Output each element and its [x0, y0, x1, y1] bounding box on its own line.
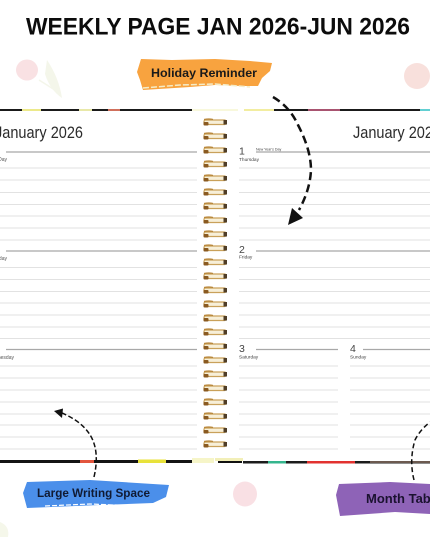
- title: WEEKLY PAGE JAN 2026-JUN 2026: [26, 14, 410, 40]
- day 1: 1: [239, 146, 245, 158]
- decorative flower bottom center: [233, 482, 257, 506]
- arrow: large writing space upward: [54, 408, 96, 477]
- spiral binding: [204, 119, 227, 448]
- left page: day dividers: [6, 152, 197, 350]
- callout: Holiday Reminder: Holiday Reminder: [151, 66, 257, 80]
- planner binding top: [0, 109, 430, 111]
- day 3: 3: [239, 343, 245, 355]
- left page: day labels: [0, 157, 14, 361]
- day 4: Sunday: [350, 354, 367, 360]
- callout: Holiday Reminder: [137, 59, 272, 90]
- day 1: [239, 146, 281, 163]
- day 2: [239, 244, 253, 260]
- day 2: 2: [239, 244, 245, 256]
- arrow: month tabs upward: [412, 422, 430, 480]
- planner binding bottom: [0, 458, 430, 464]
- callout: Large Writing Space: Large Writing Space: [37, 488, 150, 500]
- left page: ruled lines: [0, 168, 197, 449]
- day 3: Saturday: [239, 354, 259, 360]
- decorative leaf bottom left: [0, 522, 8, 537]
- day 3: [239, 343, 259, 360]
- day 1: New Year's Day: [256, 148, 281, 152]
- right page: day dividers: [256, 152, 430, 350]
- day 1: Thursday: [239, 157, 260, 163]
- day 2: Friday: [239, 254, 253, 260]
- decorative flower top right: [404, 63, 430, 89]
- day 4: 4: [350, 343, 356, 355]
- day 4: [350, 343, 367, 360]
- arrow: holiday reminder to January 2: [273, 97, 311, 225]
- decorative flower top left: [16, 60, 62, 98]
- right page: ruled lines: [239, 168, 430, 449]
- callout: Large Writing Space: [23, 480, 169, 508]
- callout: Month Tabs: [336, 482, 430, 516]
